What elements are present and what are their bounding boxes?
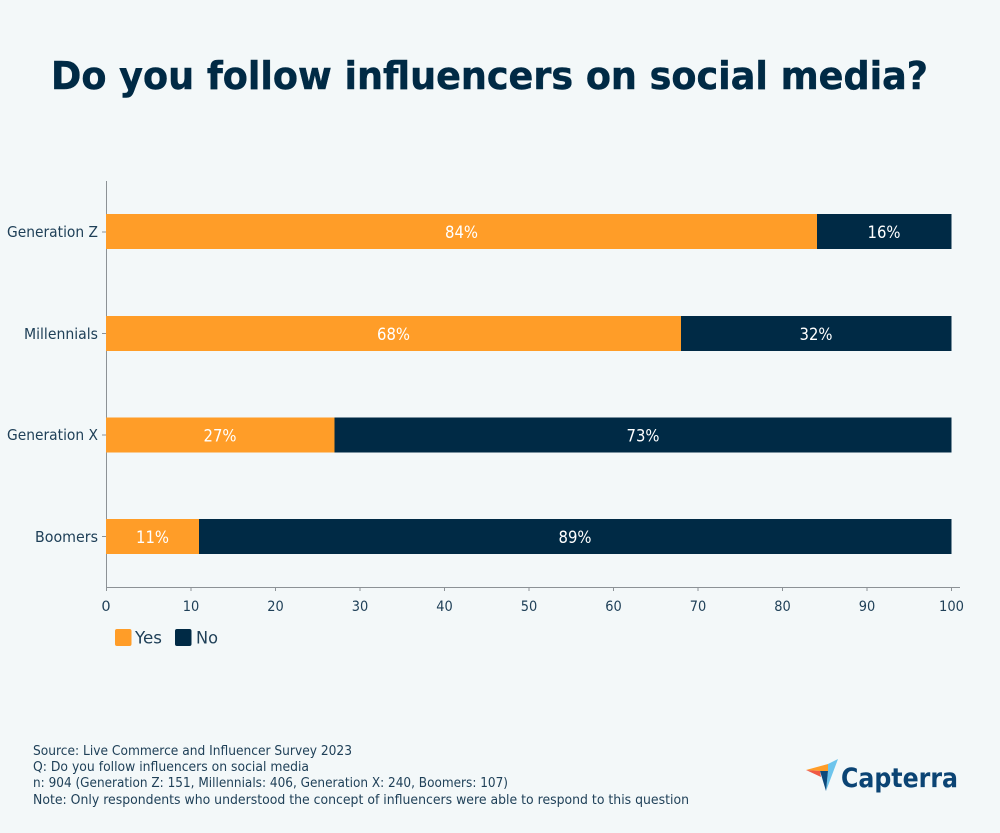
bar: Boomers: 89% <box>558 528 592 547</box>
x axis labels: 80 <box>774 599 791 615</box>
x axis labels: 30 <box>352 599 368 615</box>
legend: yes: Yes <box>134 628 162 648</box>
legend <box>115 628 218 648</box>
title: Do you follow influencers on social media? <box>51 54 928 99</box>
x axis labels: 40 <box>436 599 453 615</box>
source notes: Note: Only respondents who understood the concept of influencers were able to respond to this question <box>33 793 689 808</box>
x axis labels: 20 <box>267 599 284 615</box>
x axis labels: 70 <box>690 599 706 615</box>
x axis labels: 90 <box>859 599 875 615</box>
bar: Generation X: 73% <box>626 426 660 446</box>
bar chart <box>7 181 964 615</box>
bar: Boomers <box>106 519 952 554</box>
category labels: Generation Z <box>7 223 98 241</box>
x axis labels: 0 <box>101 599 111 615</box>
source notes <box>33 744 689 808</box>
category labels: Generation X <box>7 426 98 444</box>
x axis labels: 100 <box>939 599 964 615</box>
x axis <box>106 588 960 591</box>
bar: Boomers: 11% <box>136 528 169 547</box>
bar: Millennials <box>106 316 952 351</box>
x axis labels: 60 <box>605 599 622 615</box>
bar: Generation X: 27% <box>204 426 236 446</box>
category labels: Millennials <box>24 325 98 343</box>
bar: Generation Z: 84% <box>445 223 478 242</box>
bar: Millennials: 32% <box>800 325 832 344</box>
bar: Generation Z <box>106 214 952 249</box>
category labels <box>7 223 98 546</box>
icon: Capterra arrow <box>806 759 838 791</box>
bar: Generation X <box>106 418 952 452</box>
logo wordmark: Capterra <box>841 763 958 794</box>
source notes: Source: Live Commerce and Influencer Survey 2023 <box>33 744 352 759</box>
Capterra logo <box>806 759 958 794</box>
legend: no: No <box>196 628 218 648</box>
bar: Millennials: 68% <box>377 325 410 344</box>
x axis labels: 10 <box>183 599 199 615</box>
source notes: Q: Do you follow influencers on social media <box>33 760 309 775</box>
category labels: Boomers <box>35 528 98 546</box>
bar: Generation Z: 16% <box>868 223 900 242</box>
x axis labels <box>101 599 964 615</box>
y axis <box>102 181 106 588</box>
x axis labels: 50 <box>521 599 537 615</box>
source notes: n: 904 (Generation Z: 151, Millennials: 406, Generation X: 240, Boomers: 107) <box>33 776 508 791</box>
